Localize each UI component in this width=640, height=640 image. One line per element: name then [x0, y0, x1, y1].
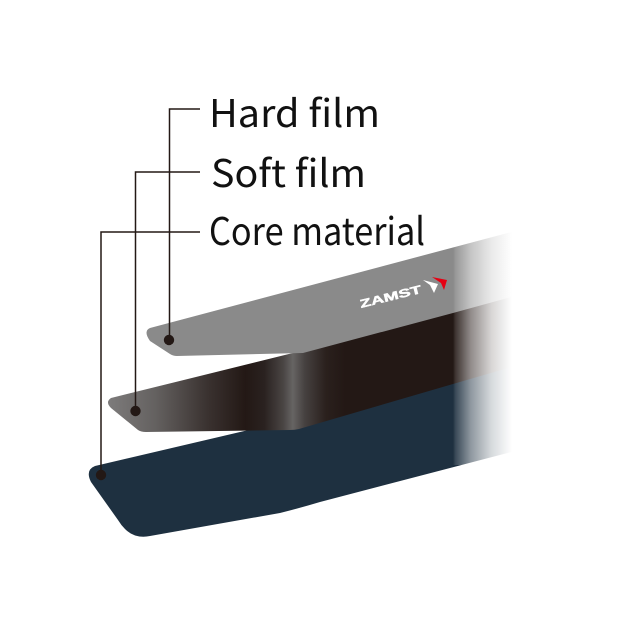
layer: core material: [89, 350, 515, 537]
logo: ZAMST: [359, 277, 447, 311]
leader line: hard film: [164, 109, 200, 345]
leader line: core material: [96, 232, 200, 480]
layer: hard film: [146, 231, 515, 356]
label: core material: Core material: [209, 201, 425, 256]
label: soft film: Soft film: [211, 143, 366, 198]
logo arrow: white: [423, 280, 438, 293]
layer: soft film: [108, 285, 515, 432]
logo arrow: red: [432, 277, 447, 290]
leader line: soft film: [130, 172, 200, 416]
label: hard film: Hard film: [209, 83, 380, 138]
logo wordmark: ZAMST: [359, 284, 423, 311]
fade to white on the right: [453, 220, 520, 465]
